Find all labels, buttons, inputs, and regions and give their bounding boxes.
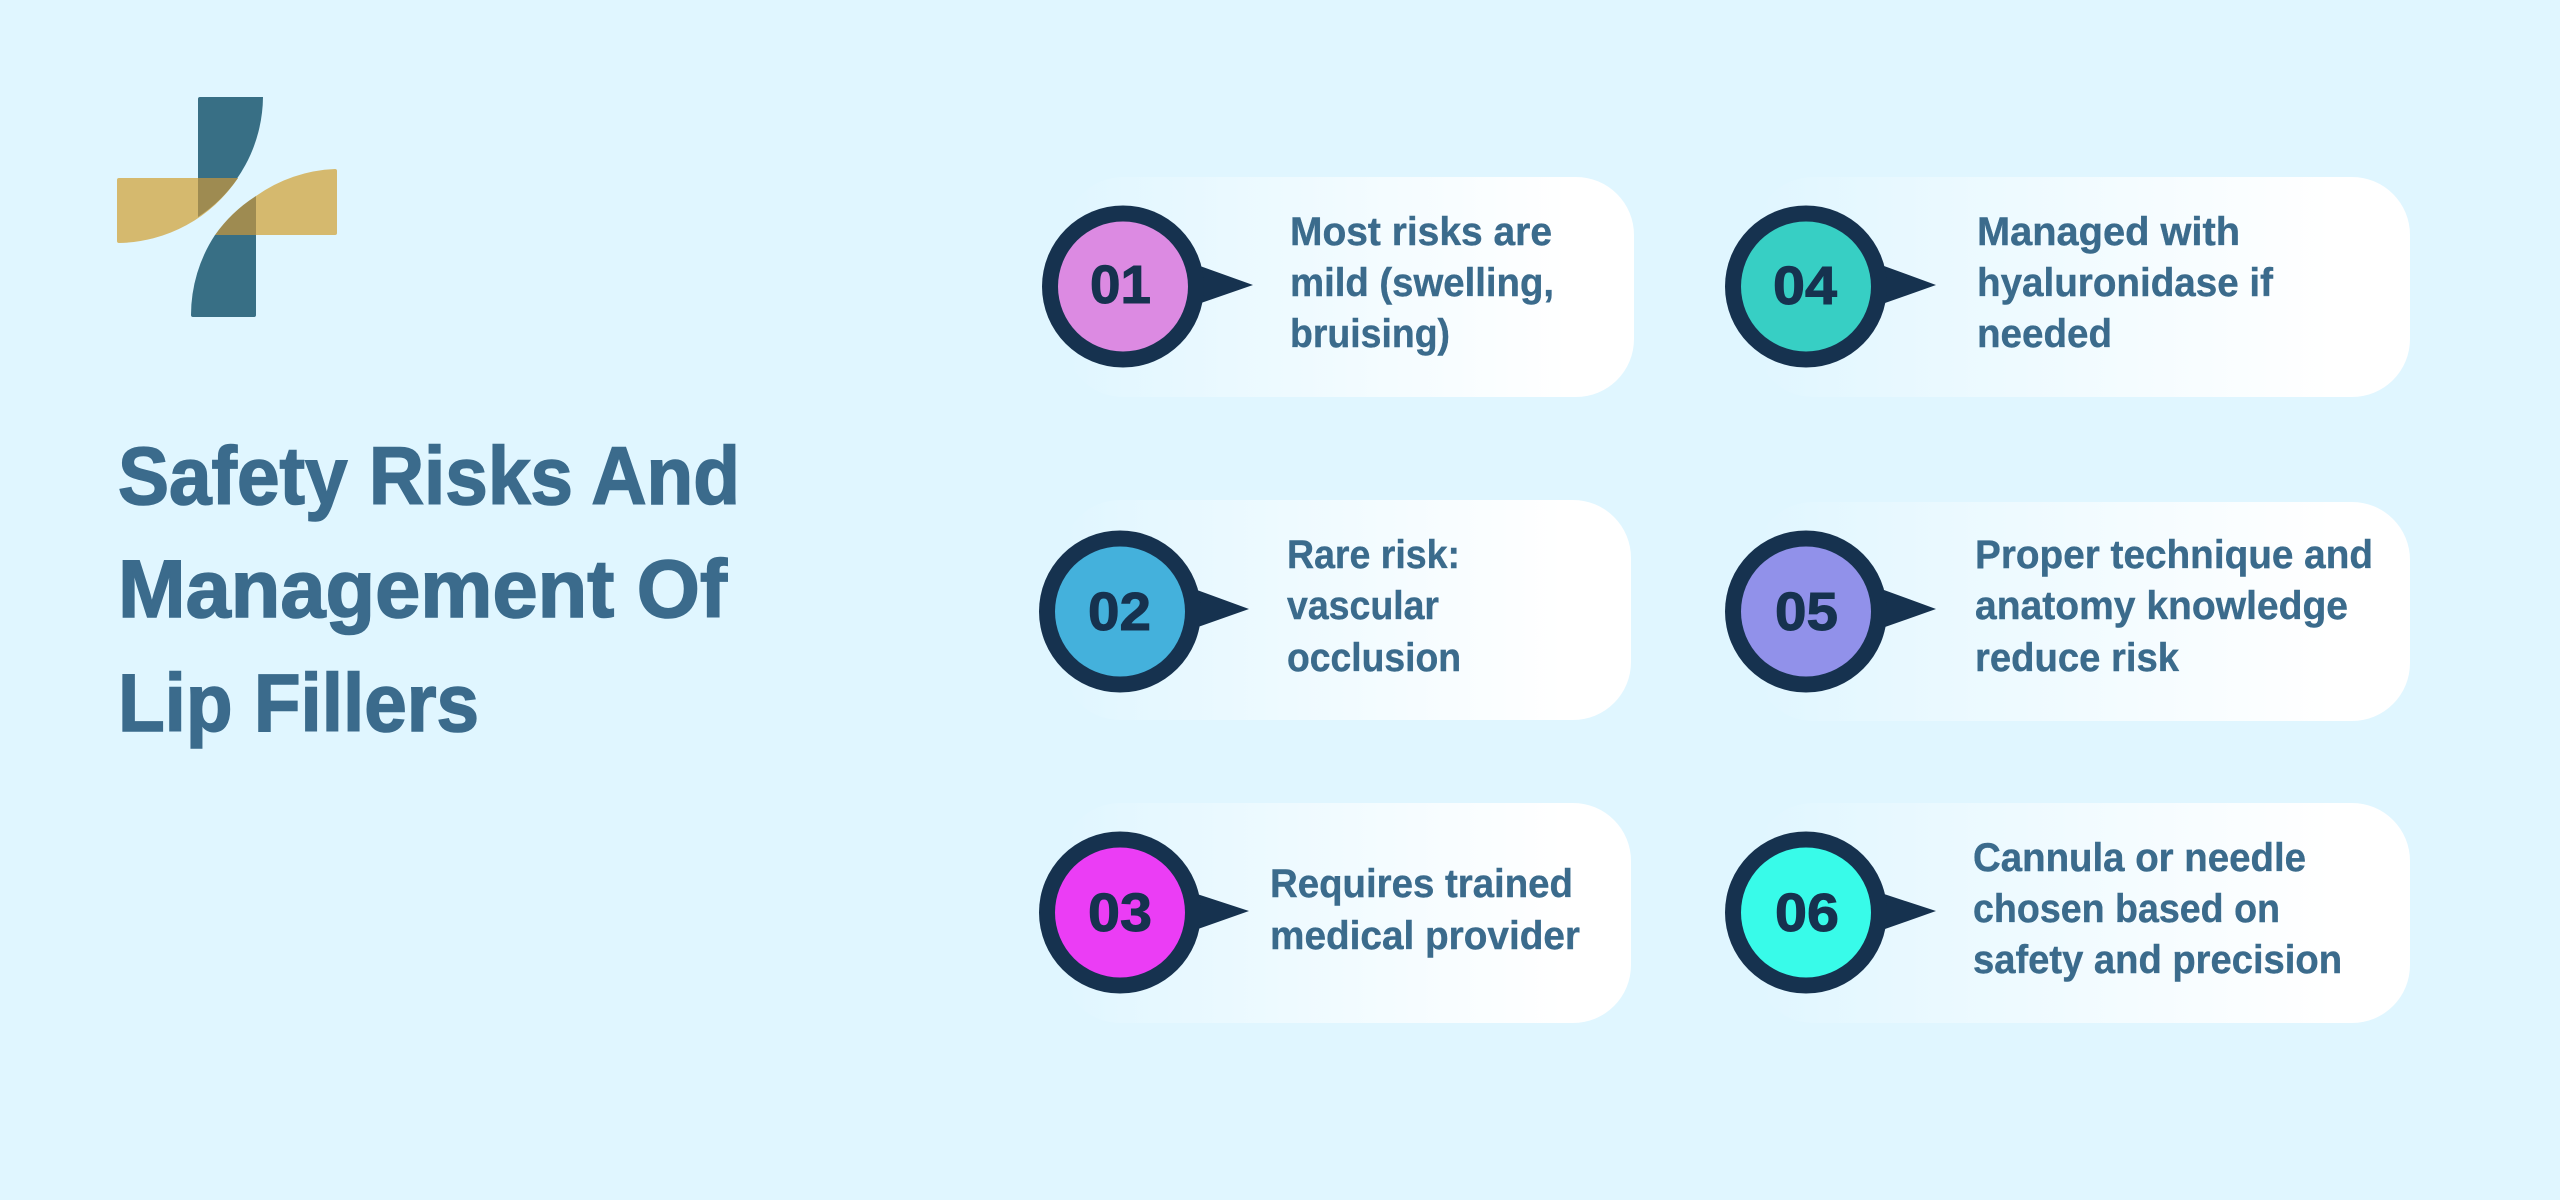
icon: number badge 03: 03 <box>1088 883 1152 943</box>
title <box>118 431 740 749</box>
icon: number badge 03 <box>1039 832 1249 994</box>
text: item 02 <box>1287 533 1461 680</box>
title: Management Of <box>118 544 728 635</box>
icon: number badge 02: 02 <box>1088 582 1151 642</box>
text: item 05: anatomy knowledge <box>1975 584 2348 628</box>
icon: medical cross logo <box>117 97 337 317</box>
text: item 03: medical provider <box>1270 914 1580 958</box>
icon: number badge 05 <box>1725 530 1936 692</box>
text: item 05 <box>1975 533 2373 680</box>
text: item 06 <box>1973 836 2342 982</box>
text: item 06: Cannula or needle <box>1973 836 2306 880</box>
text: item 02: vascular <box>1287 584 1439 628</box>
text: item 05: reduce risk <box>1975 636 2180 680</box>
text: item 02: occlusion <box>1287 636 1461 680</box>
text: item 04: Managed with <box>1977 210 2240 254</box>
text: item 05: Proper technique and <box>1975 533 2373 577</box>
panel: item 01 <box>1042 177 1634 397</box>
title: Lip Fillers <box>118 658 479 749</box>
icon: number badge 02 <box>1039 530 1249 692</box>
text: item 04 <box>1977 210 2274 356</box>
panel: item 03 <box>1039 803 1631 1023</box>
text: item 04: hyaluronidase if <box>1977 261 2274 305</box>
icon: number badge 04 <box>1725 206 1936 368</box>
text: item 01: Most risks are <box>1290 210 1552 254</box>
panel: item 04 <box>1725 177 2410 397</box>
panel: item 06 <box>1725 803 2410 1023</box>
text: item 04: needed <box>1977 312 2112 356</box>
icon: number badge 04: 04 <box>1773 256 1837 316</box>
icon: number badge 06: 06 <box>1775 883 1839 943</box>
icon: number badge 01 <box>1042 206 1253 368</box>
text: item 06: chosen based on <box>1973 887 2280 931</box>
icon: number badge 01: 01 <box>1090 255 1151 315</box>
panel: item 02 <box>1039 500 1631 720</box>
text: item 01: mild (swelling, <box>1290 261 1554 305</box>
text: item 01 <box>1290 210 1554 356</box>
panel: item 05 <box>1725 502 2410 721</box>
text: item 03: Requires trained <box>1270 862 1573 906</box>
text: item 02: Rare risk: <box>1287 533 1460 577</box>
text: item 03 <box>1270 862 1580 958</box>
title: Safety Risks And <box>118 431 740 522</box>
icon: number badge 06 <box>1725 832 1936 994</box>
text: item 01: bruising) <box>1290 312 1450 356</box>
icon: number badge 05: 05 <box>1775 582 1838 642</box>
text: item 06: safety and precision <box>1973 938 2342 982</box>
